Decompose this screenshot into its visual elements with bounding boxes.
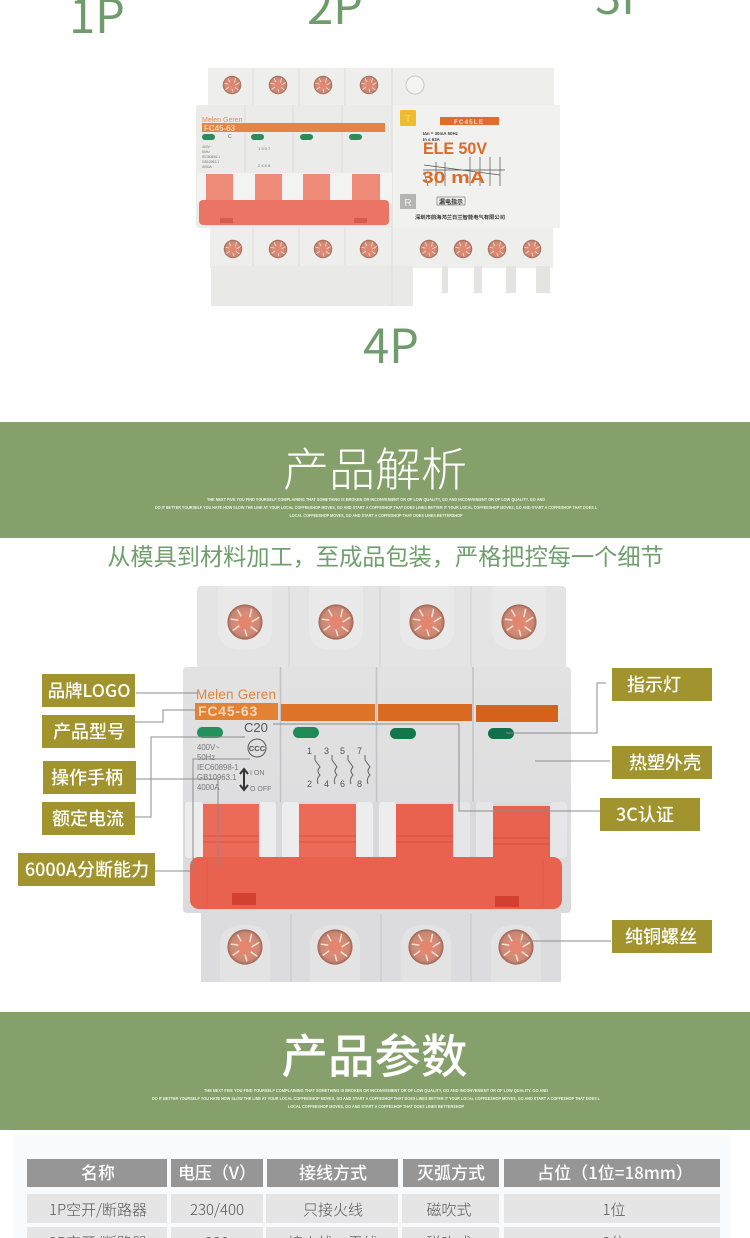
product photo: 4-pole breaker detail: FC45-63 — [198, 703, 258, 719]
product photo: 4P breaker with leakage module: C — [228, 134, 232, 140]
product photo: 4P breaker with leakage module: In ≤ 63A — [423, 137, 441, 142]
product photo: 4-pole breaker detail: 4 — [324, 779, 329, 789]
product photo: 4-pole breaker detail — [183, 586, 571, 982]
product photo: 4-pole breaker detail: 50Hz — [197, 753, 215, 762]
product photo: 4P breaker with leakage module: 4000A — [202, 165, 213, 169]
product photo: 4-pole breaker detail: 7 — [357, 746, 362, 756]
product photo: 4-pole breaker detail: 6 — [340, 779, 345, 789]
table header: 接线方式 — [299, 1159, 367, 1184]
heading: 4P: 4P — [363, 308, 419, 377]
product photo: 4-pole breaker detail: CCC — [249, 744, 266, 753]
product photo: 4P breaker with leakage module: I∆n = 30mA 50Hz — [423, 131, 459, 136]
handle sockets — [184, 802, 567, 858]
label: 3C认证 — [600, 798, 700, 831]
leader lines — [135, 683, 611, 941]
product photo: 4-pole breaker detail: 1 — [307, 746, 312, 756]
product photo: 4P breaker with leakage module: FC45LE — [454, 119, 484, 126]
table header: 名称 — [81, 1159, 115, 1184]
product photo: 4P breaker with leakage module: GB10963.1 — [202, 160, 219, 164]
banner: 产品参数 — [0, 1012, 750, 1130]
product photo: 4-pole breaker detail: GB10963.1 — [197, 773, 236, 782]
product photo: 4-pole breaker detail: 8 — [357, 779, 362, 789]
product photo: 4P breaker with leakage module: 深圳市前海鸿兰日兰智能电气有限公司 — [415, 213, 505, 221]
label: 操作手柄: 操作手柄 — [51, 764, 123, 790]
product photo: 4P breaker with leakage module: 漏电指示 — [439, 197, 463, 206]
banner: 产品参数: THE NEXT FIVE YOU FIND YOURSELF COMPLAINING THAT SOMETHING IS BROKEN OR INCONVENIENT OR OF LOW QUALITY, GO AND INCONVENIENT OR OF LOW QUALITY. GO AND — [204, 1088, 548, 1093]
label: 热塑外壳: 热塑外壳 — [629, 749, 701, 775]
bottom terminals — [201, 905, 561, 982]
label: 纯铜螺丝 — [612, 920, 712, 953]
product photo: 4P breaker with leakage module: 400V~ — [202, 145, 212, 149]
body — [183, 667, 571, 913]
banner: 产品解析: THE NEXT FIVE YOU FIND YOURSELF COMPLAINING THAT SOMETHING IS BROKEN OR INCONVENIENT OR OF LOW QUALITY, GO AND INCONVENIENT OR OF LOW QUALITY. GO AND — [207, 497, 545, 502]
top terminals — [197, 586, 566, 670]
LEDs — [197, 727, 223, 738]
product photo: 4P breaker with leakage module: T — [405, 114, 411, 125]
product photo: 4-pole breaker detail: 4000A — [197, 783, 220, 792]
product photo: 4-pole breaker detail: 2 — [307, 779, 312, 789]
table header: 灭弧方式 — [417, 1159, 485, 1184]
label: 操作手柄 — [43, 761, 136, 794]
table row: 1P — [27, 1194, 720, 1223]
panel: parameter table — [14, 1135, 730, 1238]
banner: 产品解析 — [0, 422, 750, 538]
label: 产品型号 — [42, 715, 135, 748]
banner: 产品参数: DO IT BETTER YOURSELF YOU HATE HOW SLOW THE LINE AT YOUR LOCAL COFFEESHOP MOVES, GO AND START A COFFESHOP THAT DOES LINES BETTER IT YOUR LOCAL COFFEESHOP MOVES, GO AND START A COFFESHOP THAT DOES L — [152, 1096, 600, 1101]
product photo: 4P breaker with leakage module — [196, 68, 560, 306]
label: 产品型号: 产品型号 — [53, 718, 125, 744]
table row: 1P: 磁吹式 — [426, 1199, 472, 1220]
orange band — [195, 703, 278, 720]
table row: 1P: 1位 — [602, 1199, 626, 1220]
table row: 1P: 只接火线 — [303, 1199, 363, 1220]
label: 6000A分断能力: 6000A分断能力 — [25, 856, 149, 882]
banner: 产品解析: 产品解析 — [283, 434, 467, 500]
product photo: 4-pole breaker detail: 5 — [340, 746, 345, 756]
product photo: 4P breaker with leakage module: R — [404, 198, 412, 209]
table row: 1P: 1P空开/断路器 — [49, 1199, 147, 1220]
product photo: 4P breaker with leakage module: IEC60898-1 — [202, 155, 220, 159]
banner: 产品参数: LOCAL COFFEESHOP MOVES, GO AND START A COFFESHOP THAT DOES LINES BETTERSHOP — [288, 1104, 464, 1109]
product photo: 4P breaker with leakage module: FC45-63 — [204, 124, 236, 133]
banner: 产品解析: LOCAL COFFEESHOP MOVES, GO AND START A COFFESHOP THAT DOES LINES BETTERSHOP — [290, 513, 463, 518]
banner: 产品参数: 产品参数 — [282, 1020, 468, 1087]
table row: 1P: 230/400 — [190, 1199, 244, 1220]
label: 指示灯: 指示灯 — [627, 671, 681, 697]
label: 指示灯 — [612, 668, 712, 701]
label: 额定电流: 额定电流 — [52, 805, 124, 831]
label: 品牌LOGO: 品牌LOGO — [48, 678, 130, 703]
product photo: 4P breaker with leakage module: ELE 50V — [423, 140, 487, 158]
product photo: 4-pole breaker detail: IEC60898-1 — [197, 763, 239, 772]
label: 额定电流 — [42, 802, 135, 835]
label: 3C认证: 3C认证 — [616, 801, 674, 827]
banner: 产品解析: DO IT BETTER YOURSELF YOU HATE HOW SLOW THE LINE AT YOUR LOCAL COFFEESHOP MOVES, GO AND START A COFFESHOP THAT DOES LINES BETTER IT YOUR LOCAL COFFEESHOP MOVES, GO AND START A COFFESHOP THAT DOES L — [155, 505, 597, 510]
product photo: 4-pole breaker detail: Melen Geren — [196, 687, 276, 702]
table header: 占位（1位=18mm） — [537, 1159, 693, 1184]
product photo: 4-pole breaker detail: 3 — [324, 746, 329, 756]
product photo: 4-pole breaker detail: 400V~ — [197, 743, 220, 752]
label: 品牌LOGO — [42, 674, 135, 707]
table row: 2P — [27, 1227, 720, 1238]
product photo: 4-pole breaker detail: O OFF — [250, 786, 271, 793]
table header — [27, 1159, 720, 1187]
product photo: 4-pole breaker detail: I ON — [250, 770, 264, 777]
label: 热塑外壳 — [612, 746, 712, 779]
product photo: 4P breaker with leakage module: 50Hz — [202, 150, 210, 154]
table header: 电压（V） — [178, 1159, 256, 1184]
product photo: 4P breaker with leakage module: Melen Geren — [202, 117, 243, 124]
red toggle bar — [190, 857, 562, 909]
product photo: 4-pole breaker detail: C20 — [244, 720, 268, 735]
subheading: 从模具到材料加工，至成品包装，严格把控每一个细节 — [107, 538, 664, 572]
product photo: 4P breaker with leakage module: 2 4 6 8 — [258, 163, 271, 168]
product photo: 4P breaker with leakage module: 1 3 5 7 — [258, 146, 271, 151]
label: 纯铜螺丝: 纯铜螺丝 — [625, 923, 697, 949]
product photo: 4P breaker with leakage module: 30 mA — [422, 169, 485, 187]
